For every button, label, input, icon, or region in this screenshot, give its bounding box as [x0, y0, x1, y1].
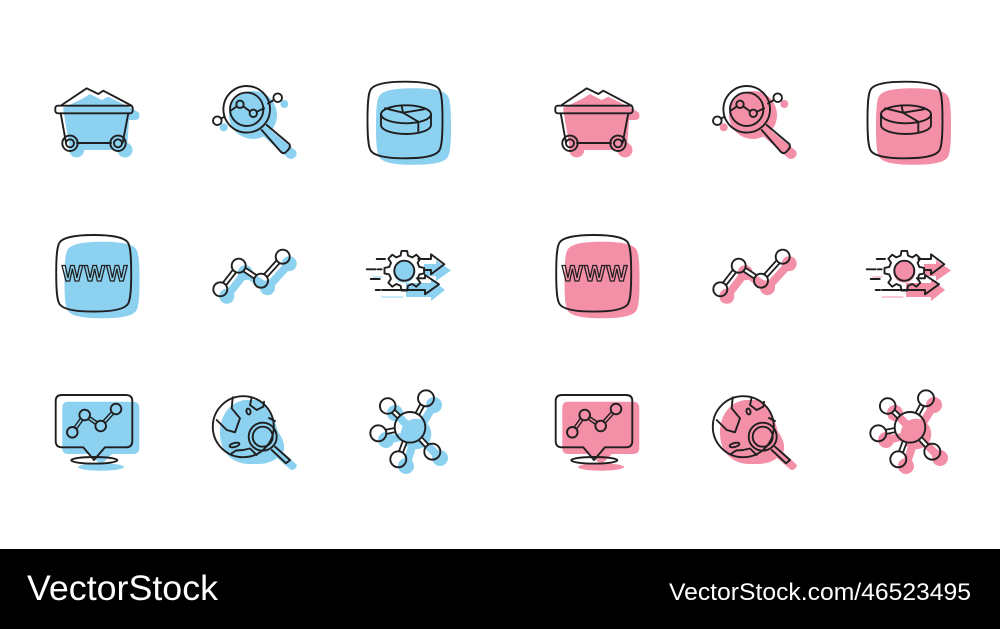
- icon: www in rounded square: WWW: [62, 261, 129, 286]
- icon: mine cart: [55, 88, 139, 158]
- image id: VectorStock.com/46523495: [669, 579, 971, 606]
- icon: network molecule pink: [870, 390, 948, 474]
- icon: pie chart in rounded square pink: [868, 82, 951, 165]
- icon: gear with arrows pink: [867, 251, 951, 301]
- icon: speech bubble with chart pink: [556, 395, 639, 471]
- panel: blue icon set: [55, 82, 451, 474]
- icon: mine cart pink: [555, 88, 640, 158]
- icon: pie chart in rounded square: [368, 82, 451, 165]
- icon: www in rounded square pink: [556, 235, 640, 318]
- icon: gear with arrows: [367, 251, 451, 301]
- brand name: VectorStock: [27, 569, 219, 608]
- icon: magnifier over chart pink: [713, 86, 797, 159]
- icon: line chart pink: [713, 250, 797, 304]
- footer bar: [0, 549, 1000, 629]
- panel: pink icon set: [555, 82, 951, 474]
- icon: www in rounded square pink: WWW: [562, 261, 629, 286]
- icon: network molecule: [370, 390, 448, 474]
- icon: speech bubble with chart: [56, 395, 139, 471]
- icon: line chart: [213, 250, 297, 304]
- icon: globe with magnifier: [213, 396, 297, 470]
- icon: magnifier over chart: [213, 86, 297, 159]
- icon: www in rounded square: [56, 235, 140, 318]
- icon: globe with magnifier pink: [713, 396, 797, 470]
